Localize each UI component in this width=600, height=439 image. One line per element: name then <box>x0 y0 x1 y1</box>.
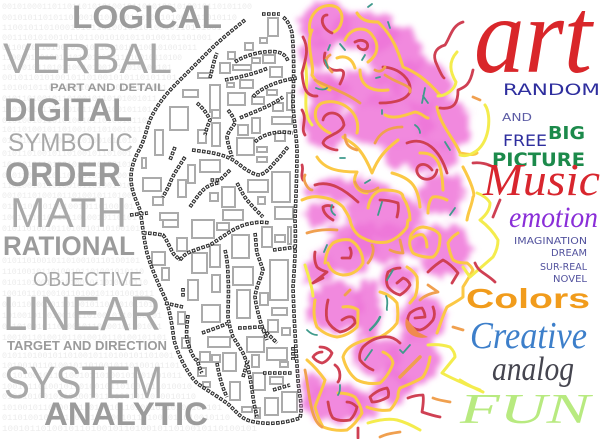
binary number background: 1001011010010110100101101001011010010110100101 <box>2 424 257 434</box>
binary number background: 100101101001011010010110101 <box>2 213 137 223</box>
binary number background: 1001011010010110100101101001011 <box>2 289 154 299</box>
binary number background: 01011010010110100101101001011010 <box>2 300 158 310</box>
binary number background: 1001011010010110100101101001011010010 <box>2 382 192 392</box>
grey cell boxes <box>142 18 297 418</box>
binary number background: 01101001011010010110100101101001011 <box>2 371 182 381</box>
binary number background: 100101101001011010010110100101101 <box>2 333 167 343</box>
word: SYMBOLIC: SYMBOLIC <box>8 129 133 157</box>
binary number background: 01011010010110100101101001 <box>2 149 132 159</box>
binary number background: 01101001011010010110100101101001011010010110 <box>2 413 230 423</box>
word: RATIONAL: RATIONAL <box>3 231 135 261</box>
red squiggles <box>302 15 500 438</box>
word: analog: analog <box>492 351 574 388</box>
word: SYSTEM: SYSTEM <box>4 357 163 408</box>
word: PICTURE: PICTURE <box>492 149 585 171</box>
binary number background: 10100101101001011010010110100101101 <box>2 361 180 371</box>
word: OBJECTIVE: OBJECTIVE <box>33 269 142 291</box>
binary number background: 01011010010110100101101001 <box>2 171 132 181</box>
word: DIGITAL: DIGITAL <box>4 92 132 128</box>
word: RANDOM: RANDOM <box>503 80 600 99</box>
binary number background: 00101000110110110101010010110101001010010110101100 <box>2 2 252 12</box>
word: Creative: Creative <box>470 315 587 357</box>
binary number background: 11001011010010101101001011010010110100 <box>2 53 182 63</box>
binary number background: 00101101001011010010110100 <box>2 191 132 201</box>
word: LOGICAL: LOGICAL <box>72 0 222 35</box>
left brain word list <box>3 0 222 432</box>
binary number background: 0101101001011010010110100101101001 <box>2 351 174 361</box>
binary number background: 10100101101010010110100101101001 <box>2 83 167 93</box>
word: IMAGINATION: IMAGINATION <box>514 236 587 247</box>
binary number background: 11010010110100101101001010 <box>2 181 132 191</box>
word: MATH: MATH <box>10 189 127 236</box>
binary number background: 01010010110101001011010010110 <box>2 116 147 126</box>
yellow squiggles <box>305 52 498 430</box>
word: TARGET AND DIRECTION: TARGET AND DIRECTION <box>7 339 167 353</box>
binary number background: 1010010110100101101001011010010110100101101 <box>2 403 222 413</box>
binary number background: 110100101101001011010100101101 <box>2 105 152 115</box>
word: AND: AND <box>502 111 532 124</box>
binary number background: 01011010010110100101101001011010010110 <box>2 392 196 402</box>
word: PART AND DETAIL: PART AND DETAIL <box>50 82 165 94</box>
binary number background: 0110010110100101010010110101100101001011 <box>2 43 197 53</box>
word: FUN: FUN <box>458 387 593 433</box>
right hemisphere coloured squiggles <box>302 4 500 438</box>
word: ORDER: ORDER <box>5 156 121 194</box>
word: VERBAL: VERBAL <box>3 35 172 83</box>
orange paint patch <box>405 318 428 338</box>
word: DREAM: DREAM <box>551 248 587 259</box>
binary number background: 0101101001011010010110101001011 <box>2 94 157 104</box>
word: BIG: BIG <box>548 123 585 144</box>
binary number background: 0101101001011010010110100101 <box>2 256 140 266</box>
binary number background: 01101001011010010110100101101001 <box>2 322 162 332</box>
hemisphere fill <box>131 14 300 423</box>
binary number background <box>2 2 257 434</box>
binary number background: 010110100101101001011010010110 <box>2 278 148 288</box>
binary number background: 0010101101011010010100110100101101001011010110 <box>2 13 237 23</box>
word: NOVEL: NOVEL <box>553 274 588 285</box>
orange squiggles <box>304 55 480 437</box>
word: Music: Music <box>482 154 600 205</box>
binary number background: 10100101101001010110100101 <box>2 160 132 170</box>
binary number background: 1010010110101100101001011010100101 <box>2 63 172 73</box>
right brain word list <box>458 0 600 433</box>
left hemisphere brain built from boxes <box>130 14 301 423</box>
right hemisphere paint splashes <box>299 0 471 422</box>
binary number background: 0101101001011010010110100101 <box>2 224 140 234</box>
word: ANALYTIC: ANALYTIC <box>44 396 208 432</box>
outline and folds of small dark squares <box>130 14 301 423</box>
binary number background: 11010010110100101101001010110 <box>2 267 144 277</box>
binary number background: 01101001011010010110100101 <box>2 202 134 212</box>
teal flecks <box>307 4 455 395</box>
binary number background: 00111010100101101100101010110100101101001 <box>2 33 212 43</box>
binary number background: 110010110100010101101001011010010110101001 <box>2 23 222 33</box>
word: Colors: Colors <box>466 283 590 314</box>
gold squiggles <box>302 6 477 430</box>
word: FREE: FREE <box>503 131 547 150</box>
binary number background: 1011010010110100101101001011 <box>2 125 142 135</box>
binary number background: 010010110100101101001011010 <box>2 136 137 146</box>
binary number background: 001011010100101101001010110101101 <box>2 73 177 83</box>
binary number background: 10100101101001011010010110100101 <box>2 311 162 321</box>
word: SUR-REAL: SUR-REAL <box>540 262 588 273</box>
word: LINEAR: LINEAR <box>3 288 161 341</box>
